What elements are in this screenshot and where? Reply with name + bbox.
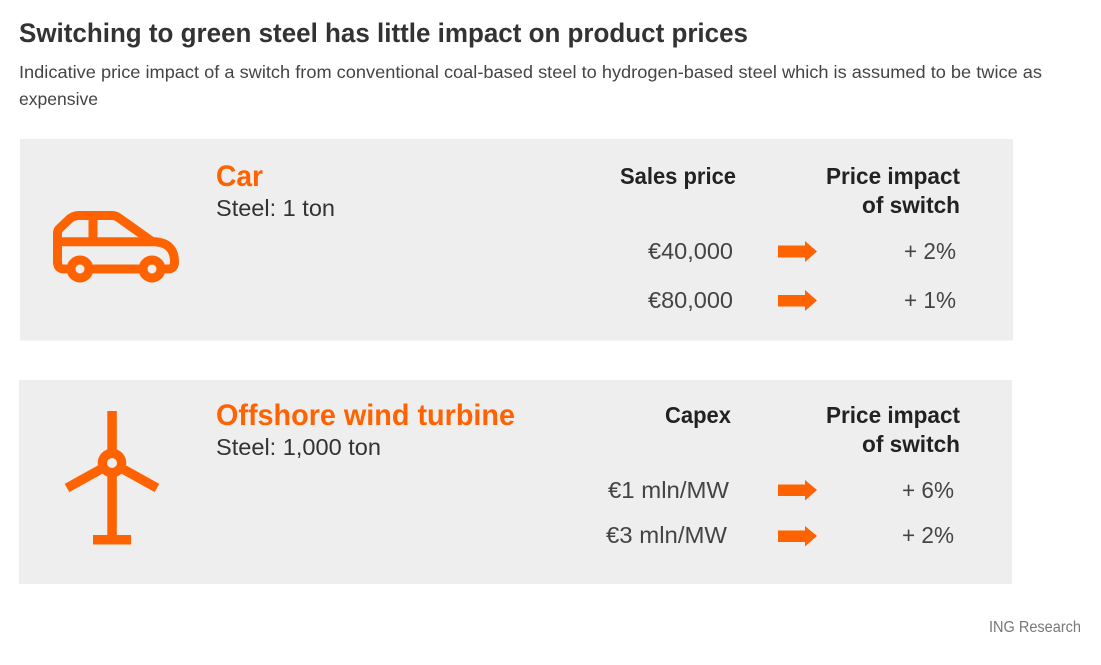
- row: 40,000: €40,000: [648, 238, 733, 264]
- source credit: ING Research: [989, 619, 1081, 636]
- row: 80,000: + 1%: [904, 287, 956, 313]
- column heading: price impact: [826, 402, 960, 457]
- column heading: sales price: Sales price: [620, 163, 736, 189]
- column heading: price impact: of switch: [862, 192, 960, 218]
- row: 40,000: + 2%: [904, 238, 956, 264]
- heading: offshore wind turbine: Offshore wind turbine: [216, 399, 515, 432]
- row: 40,000: [648, 238, 956, 264]
- column heading: price impact: Price impact: [826, 402, 960, 428]
- row: 3 mln/MW: + 2%: [902, 522, 954, 548]
- steel amount: car: Steel: 1 ton: [216, 195, 335, 221]
- heading: car: Car: [216, 160, 263, 193]
- column heading: price impact: [826, 163, 960, 218]
- title: Switching to green steel has little impact on product prices: [19, 18, 748, 48]
- column heading: price impact: Price impact: [826, 163, 960, 189]
- row: 3 mln/MW: [606, 522, 954, 548]
- icon: car: [58, 216, 174, 278]
- row: 80,000: €80,000: [648, 287, 733, 313]
- row: 1 mln/MW: €1 mln/MW: [608, 477, 729, 503]
- subtitle: expensive: [19, 89, 98, 109]
- row: 1 mln/MW: [608, 477, 954, 503]
- row: 80,000: [648, 287, 956, 313]
- subtitle: Indicative price impact of a switch from conventional coal-based steel to hydrogen-based steel which is assumed to be twice as: [19, 62, 1042, 82]
- row: 1 mln/MW: + 6%: [902, 477, 954, 503]
- steel amount: turbine: Steel: 1,000 ton: [216, 434, 381, 460]
- column heading: capex: Capex: [665, 402, 731, 428]
- panel: offshore wind turbine: [19, 380, 1012, 584]
- column heading: price impact: of switch: [862, 431, 960, 457]
- subtitle: [19, 62, 1042, 109]
- icon: wind turbine: [67, 411, 157, 544]
- row: 3 mln/MW: €3 mln/MW: [606, 522, 727, 548]
- panel: car: [20, 139, 1013, 340]
